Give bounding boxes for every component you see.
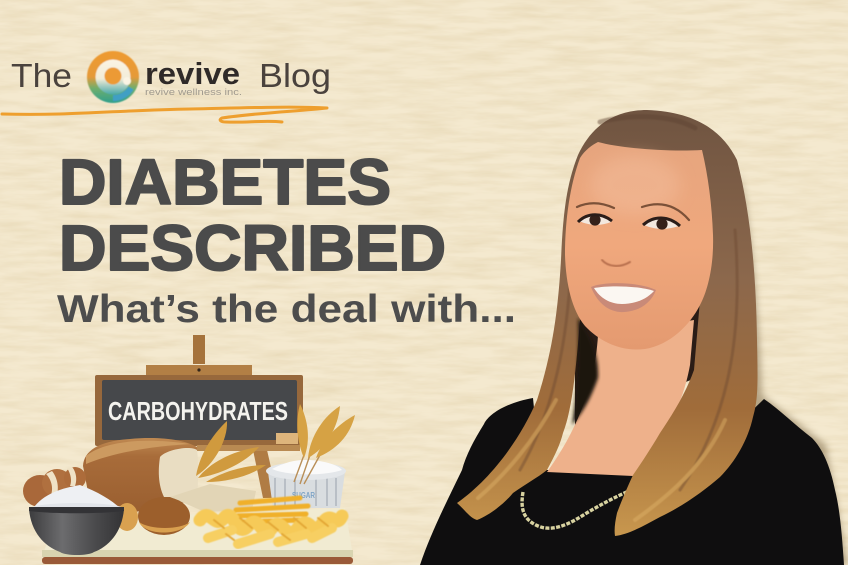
flatbread wedge [170, 484, 256, 512]
header word: Blog: Blog [259, 57, 331, 94]
hair [457, 110, 758, 536]
tray [42, 508, 353, 564]
person drop shadow [740, 170, 848, 565]
icon: revive logo ring [87, 51, 139, 103]
neck and chest [547, 320, 694, 476]
black top [420, 398, 844, 565]
person: smiling woman with long hair [420, 110, 848, 565]
eyebrows [577, 203, 689, 220]
necklace [522, 491, 629, 528]
header word: The: The [11, 57, 72, 94]
logo wordmark: revive: revive [145, 56, 240, 91]
easel with chalkboard [95, 335, 303, 498]
hair behind neck [575, 300, 708, 425]
sesame bun [138, 497, 190, 535]
pasta pile [200, 498, 342, 544]
chalkboard label: CARBOHYDRATES [108, 396, 288, 426]
shadow beside neck [572, 318, 598, 425]
illustration: carbohydrate foods and chalkboard [23, 335, 355, 564]
sugar bowl [266, 460, 346, 508]
title: Diabetes Described: DIABETES [59, 146, 391, 218]
left eye [578, 214, 612, 226]
hair streaks [478, 117, 737, 520]
logo header: The revive Blog [2, 51, 331, 122]
bread loaf [83, 438, 198, 512]
wheat stalks near bread [196, 421, 266, 482]
orange hand-drawn underline [2, 107, 327, 122]
logo tagline: revive wellness inc. [145, 87, 242, 98]
title: Diabetes Described [59, 146, 446, 284]
mouth and smile [591, 283, 656, 312]
face [565, 142, 713, 350]
sliced bread left [23, 467, 86, 507]
forehead highlight [590, 155, 680, 215]
subtitle: What’s the deal with... [57, 288, 516, 331]
title: Diabetes Described: DESCRIBED [59, 212, 446, 284]
small bun behind bowl [116, 503, 138, 531]
wheat stalks in sugar bowl [294, 404, 355, 484]
right eye [643, 218, 680, 230]
flour bowl [29, 485, 124, 555]
nose [602, 260, 630, 266]
sugar label: SUGAR [292, 491, 315, 500]
